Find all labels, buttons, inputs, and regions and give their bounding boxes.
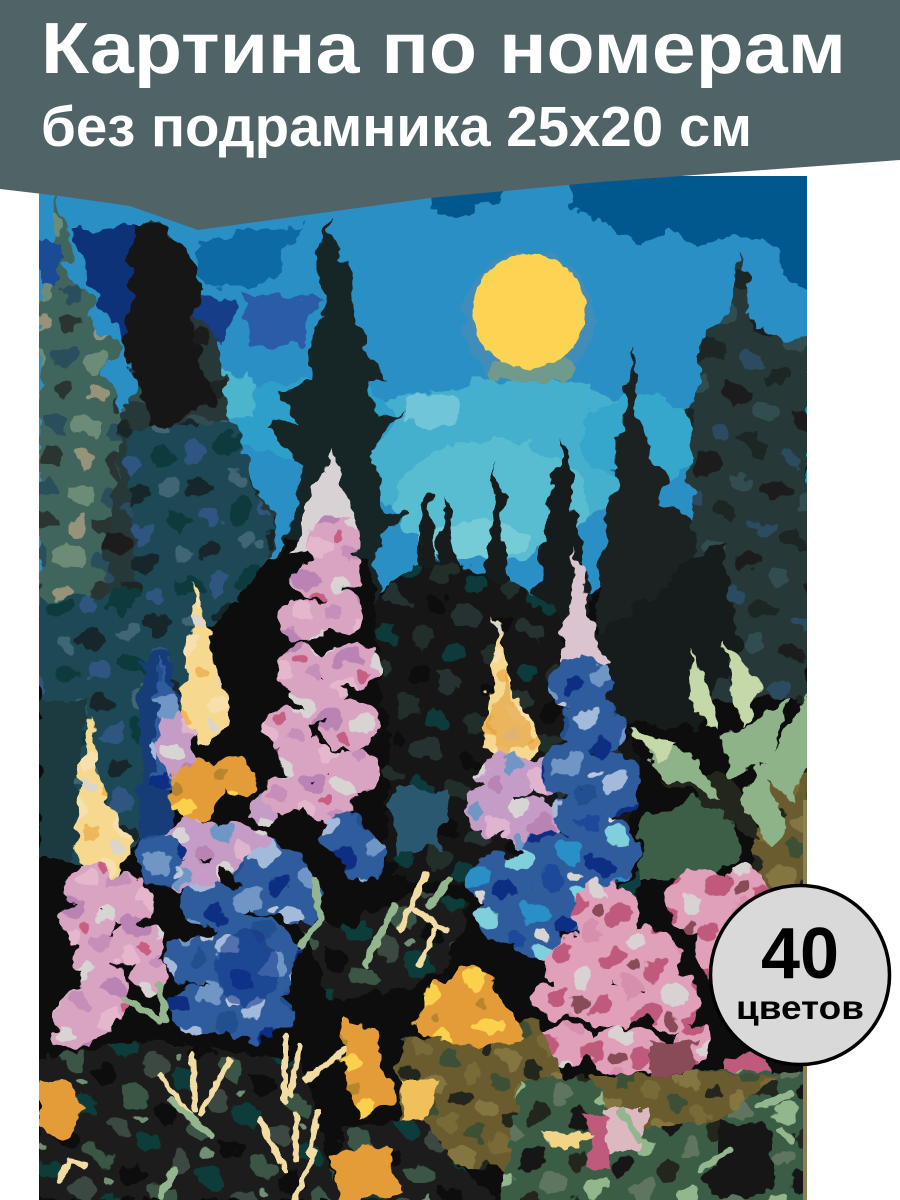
black mid meadow: [200, 540, 400, 900]
spike florets: [54, 867, 162, 1046]
pink florets: [270, 522, 374, 816]
badge number: 40: [761, 914, 839, 994]
tree: dark left spruce: [100, 220, 275, 620]
blue-teal lower left forest: [39, 586, 194, 866]
grass blades: pale stems: [60, 875, 445, 1200]
foliage: bottom meadow: [39, 890, 815, 1200]
header ribbon: [0, 0, 900, 230]
tree: far left pale spruce: [39, 190, 165, 640]
blue florets: [142, 836, 316, 1035]
flowers: yellow and orange clusters: [39, 965, 525, 1200]
tree: central tall spruce: [268, 215, 405, 610]
lupin: tall grey-tipped pink: [270, 445, 384, 878]
lavender florets: [161, 715, 275, 887]
sky: [39, 176, 807, 605]
blue florets: [321, 815, 384, 878]
painted edge highlights: [803, 800, 807, 1200]
subtitle: без подрамника 25х20 см: [41, 95, 752, 159]
painting: moonlit lupin meadow: [30, 170, 820, 1200]
forest floor backing: [30, 560, 820, 1200]
tree: navy area: [72, 222, 136, 338]
badge: 40 colours: [710, 886, 890, 1064]
badge label: цветов: [736, 989, 864, 1026]
orange florets: [175, 759, 253, 820]
moon: [472, 254, 586, 368]
lavender florets: [468, 759, 557, 849]
blue florets: [548, 663, 636, 831]
rose florets: [538, 870, 767, 1070]
forest dome centre: [360, 560, 640, 880]
grass blades: green stems: [125, 880, 790, 1195]
moon halo: [463, 252, 595, 384]
turquoise florets: [472, 820, 634, 955]
foliage: right green leaves: [632, 640, 815, 890]
lupin: blue with pale tip: [472, 552, 645, 990]
title: Картина по номерам: [41, 9, 846, 89]
tree: slim distant spruces: [412, 435, 594, 640]
pale leaves: [635, 690, 810, 850]
tree: right spruces: [594, 346, 698, 635]
forest trees: [30, 190, 820, 1200]
lupin: far left yellow and pink: [54, 715, 162, 1046]
flowers: bottom right rose lupins: [538, 870, 770, 1085]
lupin: right yellow tip with lavender: [468, 618, 557, 849]
lupin: second yellow, purple and blue: [142, 580, 316, 1035]
